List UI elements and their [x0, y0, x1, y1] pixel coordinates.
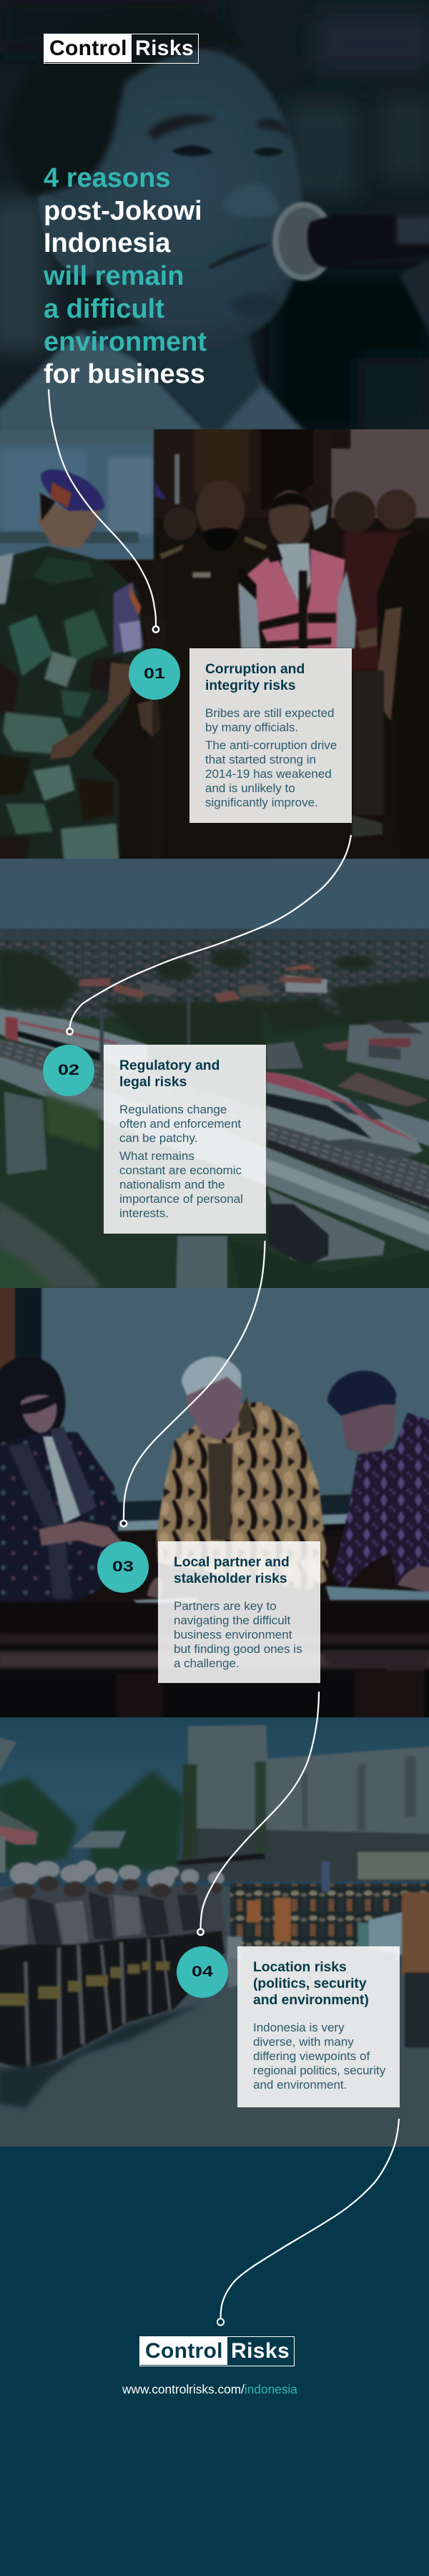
logo: Control Risks: Control — [49, 36, 127, 60]
step 04 number — [177, 1946, 228, 1998]
card body: and environment. — [253, 2078, 347, 2092]
title: environment — [44, 327, 207, 357]
viaduct — [0, 1055, 429, 1252]
panel: location photo — [0, 1717, 429, 2147]
card heading — [205, 662, 305, 693]
card heading: (politics, security — [253, 1976, 367, 1991]
card body: often and enforcement — [119, 1117, 241, 1131]
connector 3: reason 02 to reason 03 — [121, 1241, 265, 1526]
crowd on right — [230, 1884, 429, 1948]
helmets — [9, 1860, 225, 1890]
card: regulatory and legal risks — [104, 1045, 266, 1234]
nose and mouth — [222, 185, 278, 218]
logo: Control Risks — [44, 34, 199, 64]
card heading: Local partner and — [174, 1555, 290, 1570]
soldier body camo — [0, 546, 144, 862]
connector 2: reason 01 to reason 02 — [66, 835, 351, 1035]
title: a difficult — [44, 294, 164, 324]
card body: by many officials. — [205, 721, 298, 734]
card body: Bribes are still expected — [205, 706, 334, 720]
ground — [0, 1200, 102, 1291]
tracks — [267, 1139, 429, 1208]
centre officer — [152, 535, 275, 862]
card body: significantly improve. — [205, 796, 318, 809]
card body — [174, 1599, 302, 1670]
step 04 number: 04 — [192, 1963, 213, 1980]
connector 5: reason 04 to footer logo — [217, 2119, 399, 2326]
card body: business environment — [174, 1628, 292, 1641]
panel: local partner photo — [0, 1288, 429, 1717]
shields — [0, 1931, 225, 2069]
title: Indonesia — [44, 228, 170, 258]
card body: Regulations change — [119, 1103, 227, 1116]
logo: Control Risks footer: Risks — [231, 2339, 290, 2363]
card body: diverse, with many — [253, 2035, 354, 2049]
title — [43, 163, 207, 389]
background crowd — [334, 492, 375, 533]
card body: that started strong in — [205, 753, 316, 766]
card body: can be patchy. — [119, 1131, 197, 1145]
right officer — [377, 527, 429, 862]
panel: hero photo of president — [0, 0, 429, 429]
card body: Partners are key to — [174, 1599, 277, 1613]
card: local partner and stakeholder risks — [158, 1541, 320, 1683]
card heading: stakeholder risks — [174, 1571, 287, 1586]
shirt — [0, 330, 208, 432]
ear — [39, 195, 94, 276]
trees — [0, 1770, 186, 1870]
hair — [6, 6, 241, 195]
roof — [337, 1072, 428, 1107]
step 01 number — [129, 648, 180, 700]
card body: regional politics, security — [253, 2064, 385, 2077]
crowd right edge — [402, 1892, 429, 1975]
card heading: Location risks — [253, 1960, 347, 1975]
card body: 2014-19 has weakened — [205, 767, 332, 781]
soldier head — [39, 499, 99, 549]
card body: interests. — [119, 1206, 169, 1220]
pillars — [4, 1092, 47, 1175]
card body: differing viewpoints of — [253, 2049, 370, 2063]
panel: footer — [0, 2147, 429, 2576]
card heading — [119, 1058, 220, 1090]
title: post-Jokowi — [44, 196, 202, 226]
card body: constant are economic — [119, 1163, 242, 1177]
website url: www.controlrisks.com/indonesia — [122, 2382, 297, 2396]
card body — [205, 706, 337, 809]
card heading: Corruption and — [205, 662, 305, 677]
card heading: Regulatory and — [119, 1058, 220, 1073]
connector 1: title to reason 01 — [49, 389, 159, 633]
card: corruption and integrity risks — [189, 648, 352, 823]
card body: a challenge. — [174, 1657, 240, 1670]
card body: The anti-corruption drive — [205, 738, 337, 752]
table — [147, 1577, 164, 1599]
road shadows — [0, 2003, 202, 2109]
card body: Indonesia is very — [253, 2021, 345, 2034]
logo: Control Risks: Risks — [135, 36, 194, 60]
card: location risks — [237, 1946, 400, 2107]
card heading: legal risks — [119, 1075, 187, 1090]
police line bodies — [0, 1886, 227, 1958]
logo: Control Risks footer — [139, 2336, 295, 2366]
card heading: integrity risks — [205, 678, 295, 693]
card heading — [174, 1555, 290, 1586]
connector 4: reason 03 to reason 04 — [197, 1692, 319, 1935]
card body — [253, 2021, 386, 2092]
card body: but finding good ones is — [174, 1642, 302, 1656]
title: will remain — [44, 261, 184, 291]
panel: regulatory photo — [0, 859, 429, 1288]
train — [0, 1008, 147, 1072]
step 03 number: 03 — [112, 1558, 134, 1575]
card body: nationalism and the — [119, 1178, 225, 1191]
soldier sleeve and arm — [114, 582, 144, 654]
centre man — [157, 1402, 330, 1591]
building — [174, 1725, 429, 1878]
card body: and is unlikely to — [205, 781, 295, 795]
woman — [0, 1357, 66, 1440]
step 03 number — [97, 1541, 149, 1593]
brows and eyes — [147, 114, 216, 140]
card heading — [253, 1960, 369, 2008]
step 01 number: 01 — [144, 665, 165, 682]
arrested man — [269, 490, 310, 546]
card body — [119, 1103, 243, 1220]
card heading: and environment) — [253, 1993, 369, 2008]
card body: importance of personal — [119, 1192, 243, 1206]
step 02 number: 02 — [58, 1062, 79, 1078]
right houses — [347, 1023, 429, 1080]
step 02 number — [43, 1045, 94, 1096]
head — [38, 49, 301, 348]
title: 4 reasons — [44, 163, 170, 193]
right man — [327, 1371, 396, 1418]
masts — [99, 1008, 104, 1064]
title: for business — [44, 359, 205, 389]
card body: navigating the difficult — [174, 1614, 290, 1627]
card body: What remains — [119, 1149, 194, 1163]
microphone — [272, 202, 335, 280]
panel: corruption photo — [0, 429, 429, 859]
logo: Control Risks footer: Control — [145, 2339, 223, 2363]
